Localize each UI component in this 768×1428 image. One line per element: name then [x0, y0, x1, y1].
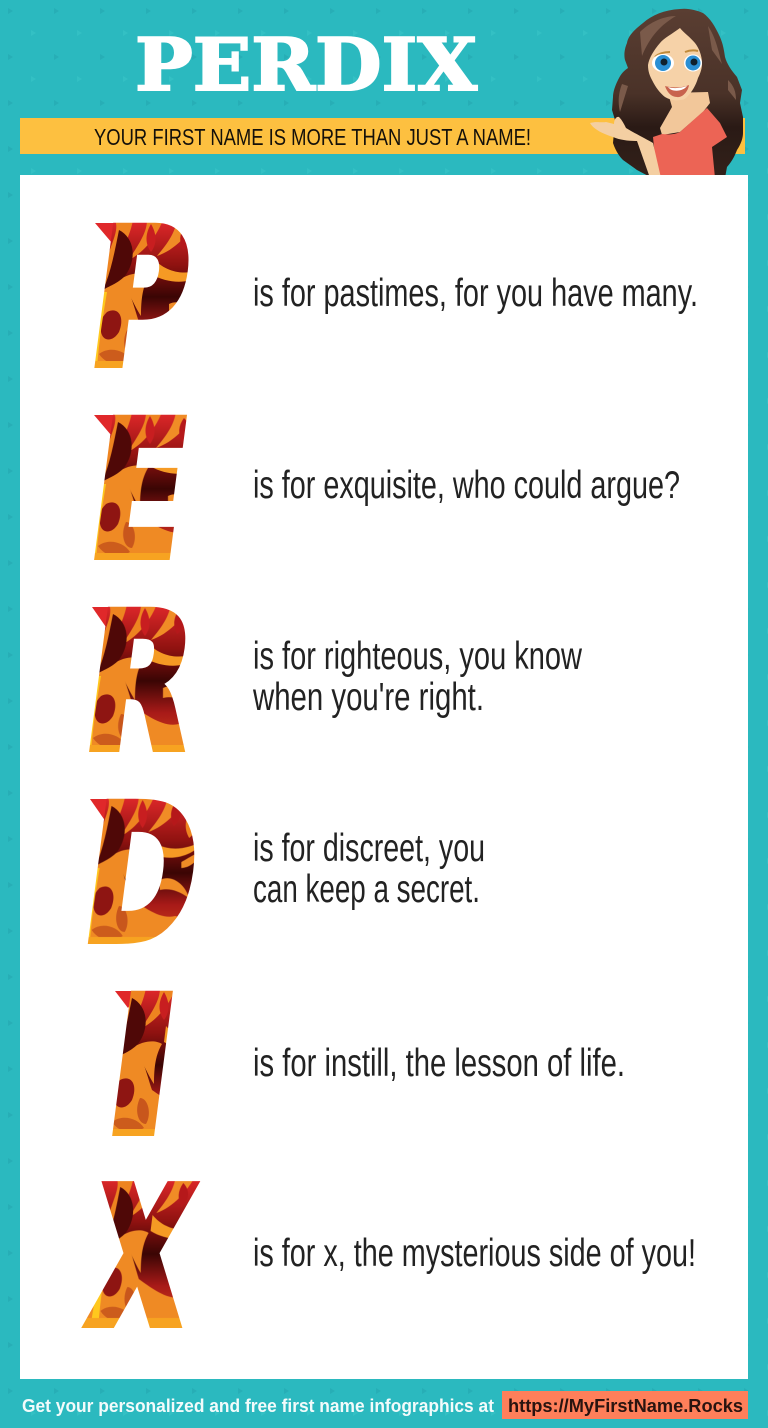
tagline text: YOUR FIRST NAME IS MORE THAN JUST A NAME! — [94, 124, 531, 150]
icon: cartoon woman mascot — [590, 9, 743, 178]
fire letter I: I — [92, 957, 192, 1179]
text D: is for discreet, you — [253, 827, 485, 870]
url badge: https://MyFirstName.Rocks — [508, 1396, 743, 1416]
eyebrows — [655, 50, 698, 57]
letter X row — [81, 1150, 696, 1366]
white content panel — [20, 175, 748, 1379]
text D — [253, 827, 485, 911]
text D: can keep a secret. — [253, 868, 480, 911]
text R — [252, 635, 583, 719]
eye left — [652, 54, 674, 72]
eye right — [684, 54, 702, 72]
fire letter E: E — [78, 381, 201, 603]
title: PERDIX — [135, 22, 477, 107]
arm and hand — [590, 117, 661, 178]
face — [648, 28, 702, 100]
text R: is for righteous, you know — [253, 635, 583, 678]
url badge — [502, 1391, 748, 1419]
letter E row — [78, 381, 680, 603]
fire letter R: R — [73, 573, 208, 795]
hair — [612, 9, 743, 178]
letter P row — [79, 187, 698, 411]
letter R row — [73, 573, 583, 795]
letter I row — [92, 957, 625, 1179]
letter D row — [72, 765, 485, 987]
neck and chest skin — [660, 92, 710, 135]
fire letter X: X — [81, 1150, 201, 1366]
text I: is for instill, the lesson of life. — [253, 1042, 625, 1085]
fire letter D: D — [72, 765, 212, 987]
fire letter P: P — [79, 187, 202, 411]
yellow tagline banner — [20, 118, 745, 154]
footer text: Get your personalized and free first name infographics at — [22, 1396, 494, 1416]
text R: when you're right. — [252, 676, 484, 719]
footer — [22, 1391, 748, 1419]
mouth — [665, 85, 689, 97]
shirt — [653, 108, 727, 178]
